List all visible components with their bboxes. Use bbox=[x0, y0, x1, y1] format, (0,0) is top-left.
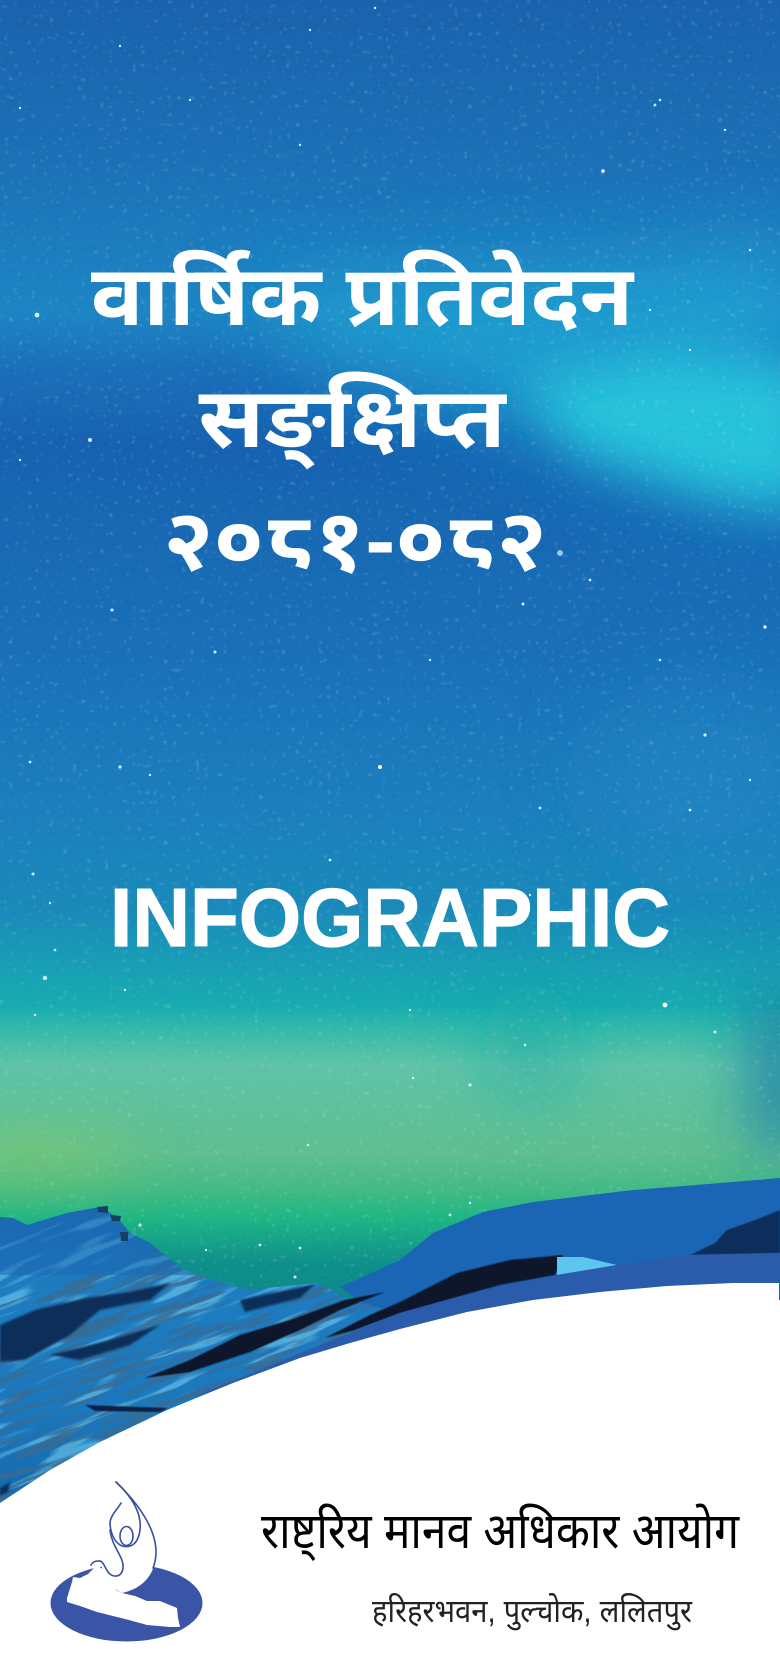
heading: infographic: INFOGRAPHIC bbox=[110, 871, 670, 964]
dark peak tips bbox=[97, 1206, 128, 1241]
address: हरिहरभवन, पुल्चोक, ललितपुर bbox=[372, 1593, 693, 1631]
logo: national human rights commission bbox=[50, 1482, 202, 1642]
stars bbox=[19, 7, 767, 1278]
light blue snow patch bbox=[557, 1257, 617, 1275]
title: सङ्क्षिप्त: सङ्क्षिप्त bbox=[198, 371, 508, 469]
logo: blue oval bbox=[50, 1564, 202, 1642]
logo: white flame body bbox=[100, 1482, 156, 1593]
logo: Nepal map bbox=[67, 1565, 180, 1627]
title: year: २०८१-०८२ bbox=[163, 493, 547, 589]
faint star dust bbox=[0, 0, 780, 1290]
logo: flame outline and figure bbox=[91, 1482, 156, 1576]
blue curved band bbox=[193, 1253, 780, 1397]
mountains bbox=[0, 1178, 780, 1546]
dark ridge at right bbox=[690, 1210, 780, 1255]
rock streaks bbox=[0, 1283, 315, 1496]
black streak bbox=[145, 1255, 563, 1378]
background: night sky with aurora bbox=[0, 0, 780, 1300]
title: वार्षिक प्रतिवेदन: वार्षिक प्रतिवेदन bbox=[91, 249, 634, 343]
white curved footer panel bbox=[0, 1283, 780, 1655]
mountain: left peak bbox=[0, 1208, 394, 1503]
mountain: right ridge bbox=[340, 1178, 780, 1330]
